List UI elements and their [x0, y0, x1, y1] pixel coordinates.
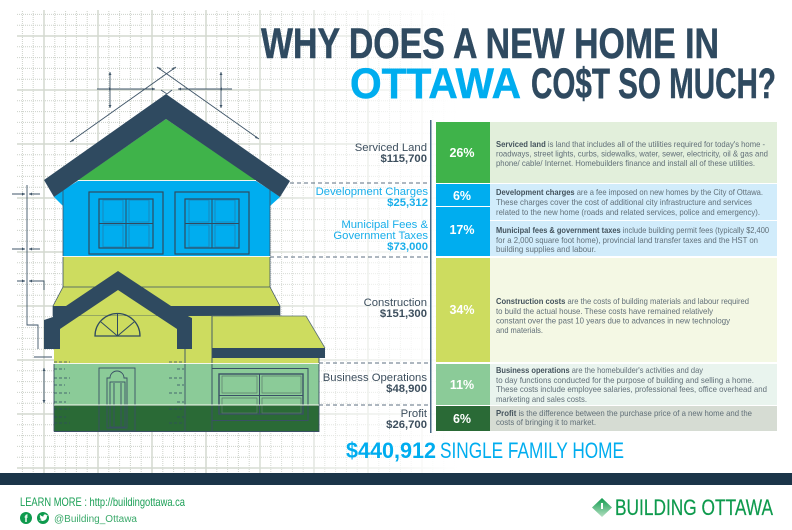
upper storey blue — [54, 181, 280, 256]
upper gable green — [78, 119, 256, 180]
panel: construction: and materials. — [496, 326, 543, 335]
house illustration — [44, 94, 325, 432]
title — [261, 20, 776, 108]
panel: construction: Construction costs are the costs of building materials and labour required — [496, 297, 749, 306]
label: business operations: $48,900 — [386, 383, 427, 395]
bar 17 percent — [436, 207, 490, 256]
panel: profit: Profit is the difference between the purchase price of a new home and the — [496, 409, 752, 418]
bar 17 percent: 17% — [449, 223, 475, 237]
label: development charges — [316, 186, 428, 209]
bar 34 percent: 34% — [449, 303, 475, 317]
panel: business operations: Business operations are the homebuilder's activities and day — [496, 366, 704, 375]
bar 6 percent profit — [436, 406, 490, 431]
learn more text: LEARN MORE : http://buildingottawa.ca — [20, 495, 185, 509]
panel: municipal fees — [490, 221, 777, 256]
icon: leaf diamond — [592, 498, 612, 517]
garage door — [212, 368, 308, 420]
explanation panels — [490, 122, 777, 431]
right window — [175, 192, 249, 254]
table left rule — [430, 120, 432, 433]
brick marks — [54, 362, 184, 423]
lower walls yellow — [54, 316, 319, 363]
arched window — [95, 314, 140, 336]
panel: serviced land: Serviced land is land that includes all of the utilities required for today's home - — [496, 140, 765, 149]
bar 26 percent — [436, 122, 490, 183]
panel: development charges: Development charges are a fee imposed on new homes by the City of Ottawa. — [496, 188, 763, 197]
panel: business operations — [490, 364, 777, 405]
label: construction: $151,300 — [380, 308, 427, 320]
label: business operations: Business Operations — [323, 372, 427, 384]
blueprint dimension arrows — [12, 67, 259, 403]
panel: serviced land: phone/ cable/ Internet. Homebuilders finance and install all of these utilities. — [496, 159, 755, 168]
label: profit: Profit — [401, 408, 428, 420]
bar 6 percent profit: 6% — [453, 412, 471, 426]
front door — [99, 368, 135, 431]
label: development charges: $25,312 — [387, 197, 428, 209]
icon: facebook: f — [24, 514, 28, 525]
garage roof — [188, 316, 325, 358]
panel: construction: to build the actual house. These costs have remained relatively — [496, 307, 714, 316]
house structural lines — [54, 316, 319, 432]
total amount: $440,912 — [346, 438, 436, 463]
bar 11 percent: 11% — [450, 378, 474, 392]
bar 26 percent: 26% — [449, 146, 475, 160]
panel: municipal fees: Municipal fees & government taxes include building permit fees (typically $2,400 — [496, 226, 769, 235]
label: municipal fees: $73,000 — [387, 241, 428, 253]
total caption: SINGLE FAMILY HOME — [440, 438, 624, 463]
white band dividers — [54, 180, 319, 405]
label: serviced land — [355, 142, 427, 165]
label: serviced land: $115,700 — [380, 153, 427, 165]
total price — [346, 438, 624, 463]
panel: development charges: related to the new home (roads and related services, police and emergency). — [496, 208, 760, 217]
bar 11 percent — [436, 364, 490, 405]
panel: municipal fees: building supplies and labour. — [496, 245, 596, 254]
panel: business operations: to day functions conducted for the purpose of building and selling a home. — [496, 376, 754, 385]
panel: development charges — [490, 184, 777, 220]
bar 34 percent — [436, 258, 490, 362]
panel: profit — [490, 406, 777, 431]
panel: municipal fees: for a 2,000 square foot home), provincial land transfer taxes and the HST on — [496, 236, 758, 245]
band of profit — [54, 406, 319, 432]
label: profit — [386, 408, 428, 431]
icon: facebook — [20, 512, 32, 525]
windows — [89, 192, 249, 254]
dashed leader lines — [270, 183, 431, 405]
panel: development charges: These charges cover the cost of additional city infrastructure and services — [496, 198, 752, 207]
bar 6 percent development: 6% — [453, 189, 471, 203]
percentage bars — [436, 122, 490, 431]
label: construction: Construction — [364, 297, 427, 309]
front gable roof — [44, 271, 280, 349]
logo: building ottawa — [592, 495, 773, 520]
panel: construction: constant over the past 10 years due to advances in new technology — [496, 316, 731, 326]
label: profit: $26,700 — [386, 419, 427, 431]
panel: serviced land: roadways, street lights, curbs, sidewalks, water, sewer, electricity, oil & gas and — [496, 150, 768, 158]
band of business operations — [54, 364, 319, 404]
label: serviced land: Serviced Land — [355, 142, 427, 154]
panel: business operations: These costs include employee salaries, professional fees, office overhead and — [496, 385, 767, 394]
footer band — [0, 473, 792, 485]
main roof — [44, 94, 290, 197]
panel: profit: costs of bringing it to market. — [496, 418, 596, 427]
label: business operations — [323, 372, 427, 395]
label: municipal fees: Municipal Fees & — [341, 219, 428, 231]
social handle: @Building_Ottawa — [54, 514, 137, 525]
title line 2 ottawa: OTTAWA — [350, 60, 521, 108]
cost labels — [316, 142, 428, 431]
bar 6 percent development — [436, 184, 490, 206]
middle storey and lower roof — [53, 257, 280, 316]
label: municipal fees — [333, 219, 428, 253]
upper storey wall lines — [63, 190, 270, 256]
left window — [89, 192, 163, 254]
panel: business operations: marketing and sales costs. — [496, 395, 587, 404]
label: construction — [364, 297, 427, 320]
panel: serviced land — [490, 122, 777, 183]
panel: construction — [490, 258, 777, 362]
icon: twitter — [37, 512, 49, 524]
label: municipal fees: Government Taxes — [333, 230, 428, 242]
label: development charges: Development Charges — [316, 186, 428, 198]
